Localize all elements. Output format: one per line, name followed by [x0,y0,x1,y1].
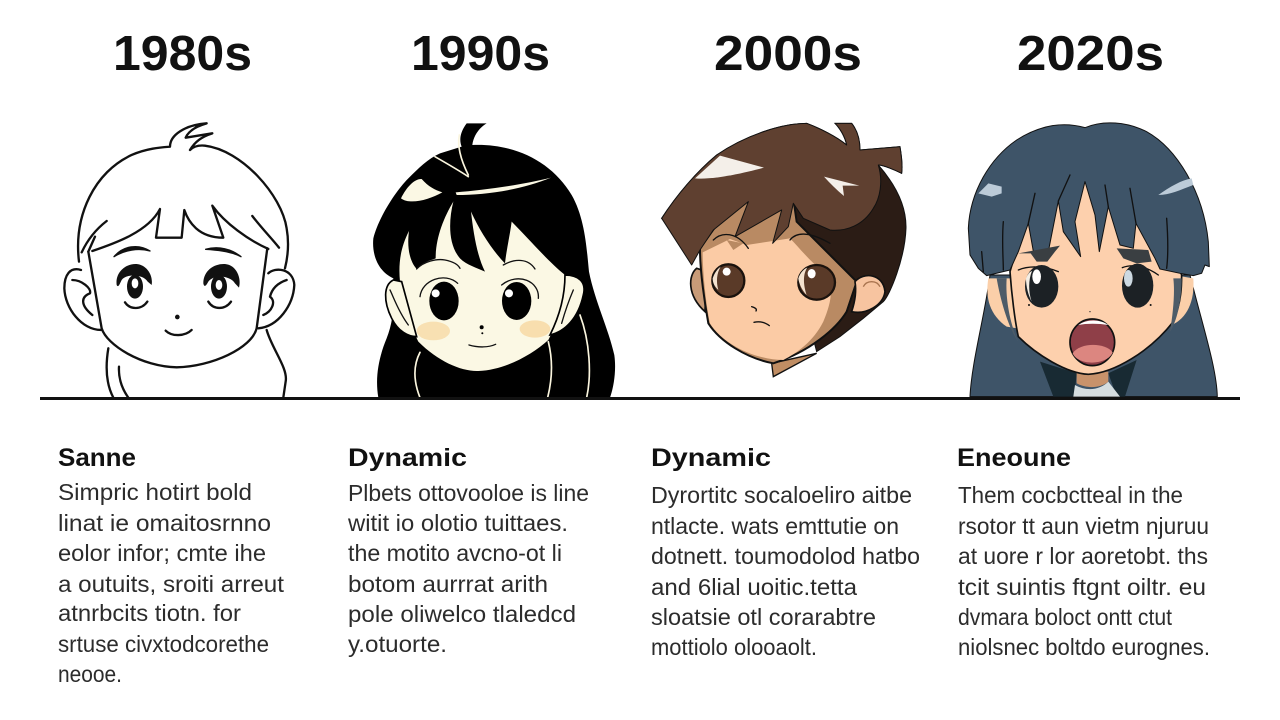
character: 1980s line-art child [64,123,294,398]
eyes [1025,265,1058,308]
text block: 1990s column: y.otuorte. [348,631,447,657]
text block: 1980s column: a outuits, sroiti arreut [58,571,285,597]
dark hair mass [662,123,906,352]
text block: 2000s column: Dyrortitc socaloeliro aitbe [651,482,912,508]
text block: 2020s column: dvmara boloct ontt ctut [958,604,1173,630]
text block: 1990s column [347,444,589,657]
left ear [691,268,707,312]
text block: 2000s column: ntlacte. wats emttutie on [651,513,899,539]
text block: 1990s column: botom aurrrat arith [348,571,548,597]
hair highlights [695,156,764,179]
text block: 1980s column [58,444,285,687]
neck [1077,372,1108,387]
text block: 2000s column: sloatsie otl corarabtre [651,604,876,630]
face outline [88,248,267,367]
back hair [970,275,1217,397]
ears [64,269,294,330]
mouth [1070,319,1115,366]
text block: 2020s column: at uore r lor aoretobt. ths [958,543,1208,569]
hair highlights [401,179,442,201]
text block: 1990s column: the motito avcno-ot li [348,540,562,566]
ears [987,278,1017,328]
text block: 2000s column: mottiolo olooaolt. [651,634,817,660]
text block: 2000s column: and 6lial uoitic.tetta [651,574,857,600]
title: 1980s: 1980s [113,27,252,81]
text block: 2020s column [957,444,1210,660]
hair highlights [978,183,1002,197]
face shade [700,198,857,363]
text block: 1980s column: Sanne [58,444,136,472]
decade titles [113,27,1164,81]
eyes [420,278,538,298]
title: 2000s: 2000s [714,27,862,81]
text block: 2000s column [651,444,920,660]
neck [772,353,817,377]
character: 2020s blue-haired girl [968,123,1217,397]
text block: 1980s column: atnrbcits tiotn. for [58,600,241,626]
text block: 1980s column: eolor infor; cmte ihe [58,540,266,566]
fringe and dome [968,123,1209,276]
title: 1990s: 1990s [411,27,550,81]
nose and mouth [480,325,484,329]
text block: 1990s column: Plbets ottovooloe is line [348,480,589,506]
text block: 1980s column: srtuse civxtodcorethe [58,631,269,657]
text block: 2020s column: Eneoune [957,444,1071,472]
text block: 1990s column: Dynamic [348,444,467,472]
text block: 1980s column: neooe. [58,661,122,687]
black hair silhouette [373,123,615,398]
face light [703,238,831,360]
fringe strands [408,202,453,269]
eyes [117,264,152,286]
text block: 2020s column: niolsnec boltdo eurognes. [958,634,1210,660]
text block: 1980s column: Simpric hotirt bold [58,479,252,505]
character: 2000s brown-haired boy [662,123,906,377]
text block: 1990s column: witit io olotio tuittaes. [347,510,568,536]
text block: 2000s column: dotnett. toumodolod hatbo [651,543,920,569]
ears [386,280,417,337]
text block: 1990s column: pole oliwelco tlaledcd [348,601,576,627]
character: 1990s black-haired girl [373,123,615,398]
face [1010,182,1182,374]
eyes [712,264,744,297]
text block: 2020s column: tcit suintis ftgnt oiltr. eu [958,574,1206,600]
title: 2020s: 2020s [1017,27,1164,81]
fringe [92,206,268,251]
brows, nose and mouth [713,234,830,248]
text block: 2020s column: rsotor tt aun vietm njuruu [958,513,1209,539]
lashes [1018,246,1152,263]
brows [114,247,241,257]
hair outline [78,123,288,268]
neck [107,330,286,398]
text block: 1980s column: linat ie omaitosrnno [58,510,271,536]
right ear [852,276,885,312]
nose and mouth [175,315,180,319]
collar [1073,382,1120,397]
hair lines [982,175,1168,272]
text block: 2000s column: Dynamic [651,444,771,472]
blush [417,322,450,340]
text block: 2020s column: Them cocbctteal in the [958,482,1183,508]
timeline rule [40,397,1240,400]
face [399,202,565,371]
main brown hair [662,123,902,265]
